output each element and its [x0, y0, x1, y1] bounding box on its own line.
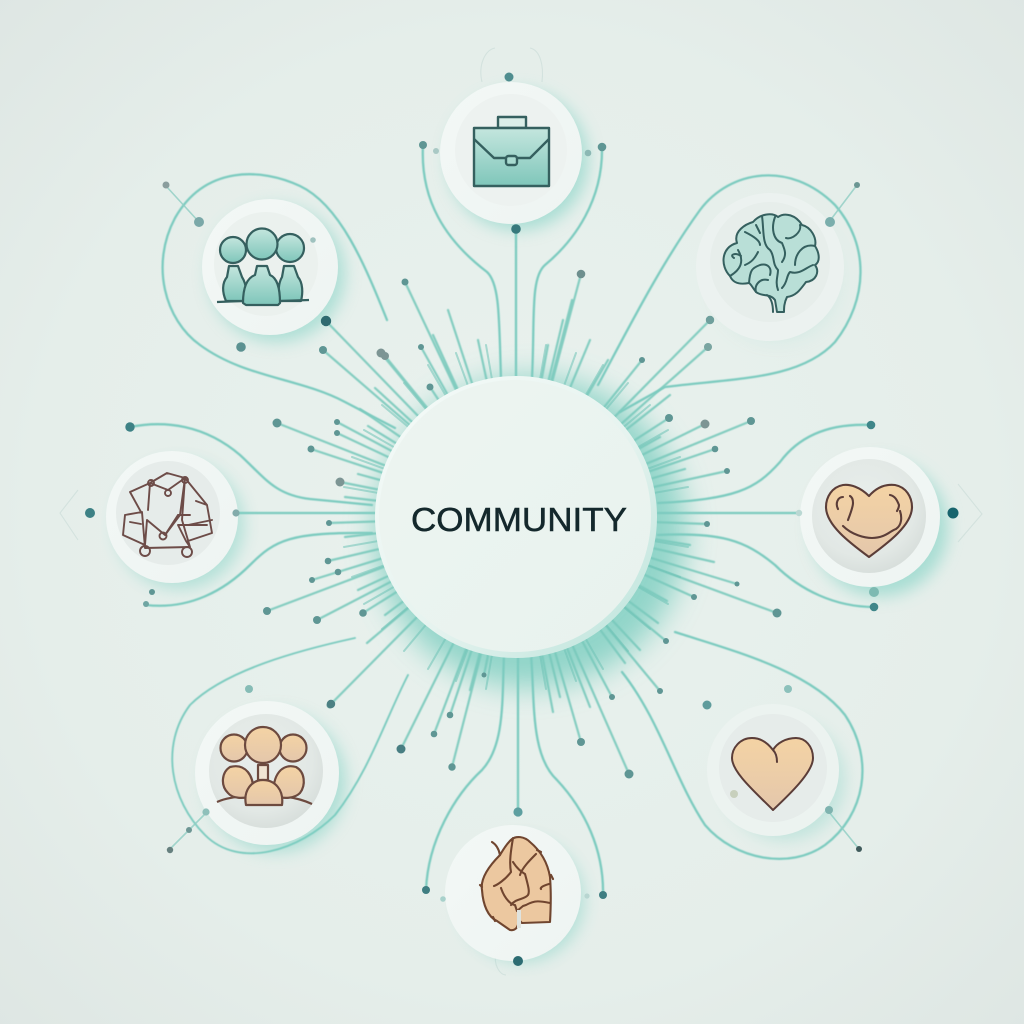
ray end dots	[263, 270, 782, 778]
icon: teal group	[217, 228, 309, 305]
hub glow	[374, 376, 686, 688]
central hub	[375, 376, 657, 658]
radial rays	[267, 274, 777, 774]
node tick lines	[166, 185, 859, 849]
icon: network cart	[123, 473, 212, 557]
node: briefcase	[419, 72, 606, 234]
node: network cart	[85, 422, 244, 607]
icon: tan group	[217, 727, 312, 805]
icon: briefcase	[474, 117, 549, 186]
hub label: COMMUNITY	[411, 501, 627, 538]
node: brain	[696, 182, 860, 351]
icon: organ	[480, 837, 553, 930]
icon: heart	[732, 738, 813, 810]
short dense rays	[344, 345, 688, 689]
connector curves	[130, 145, 874, 895]
icon: brain	[724, 214, 819, 312]
node: smiling heart	[796, 421, 958, 611]
node: heart	[702, 685, 862, 852]
node: organ	[422, 807, 607, 966]
node: tan group	[167, 685, 346, 853]
icon: smiling heart	[826, 485, 912, 557]
node: team teal	[162, 182, 345, 352]
